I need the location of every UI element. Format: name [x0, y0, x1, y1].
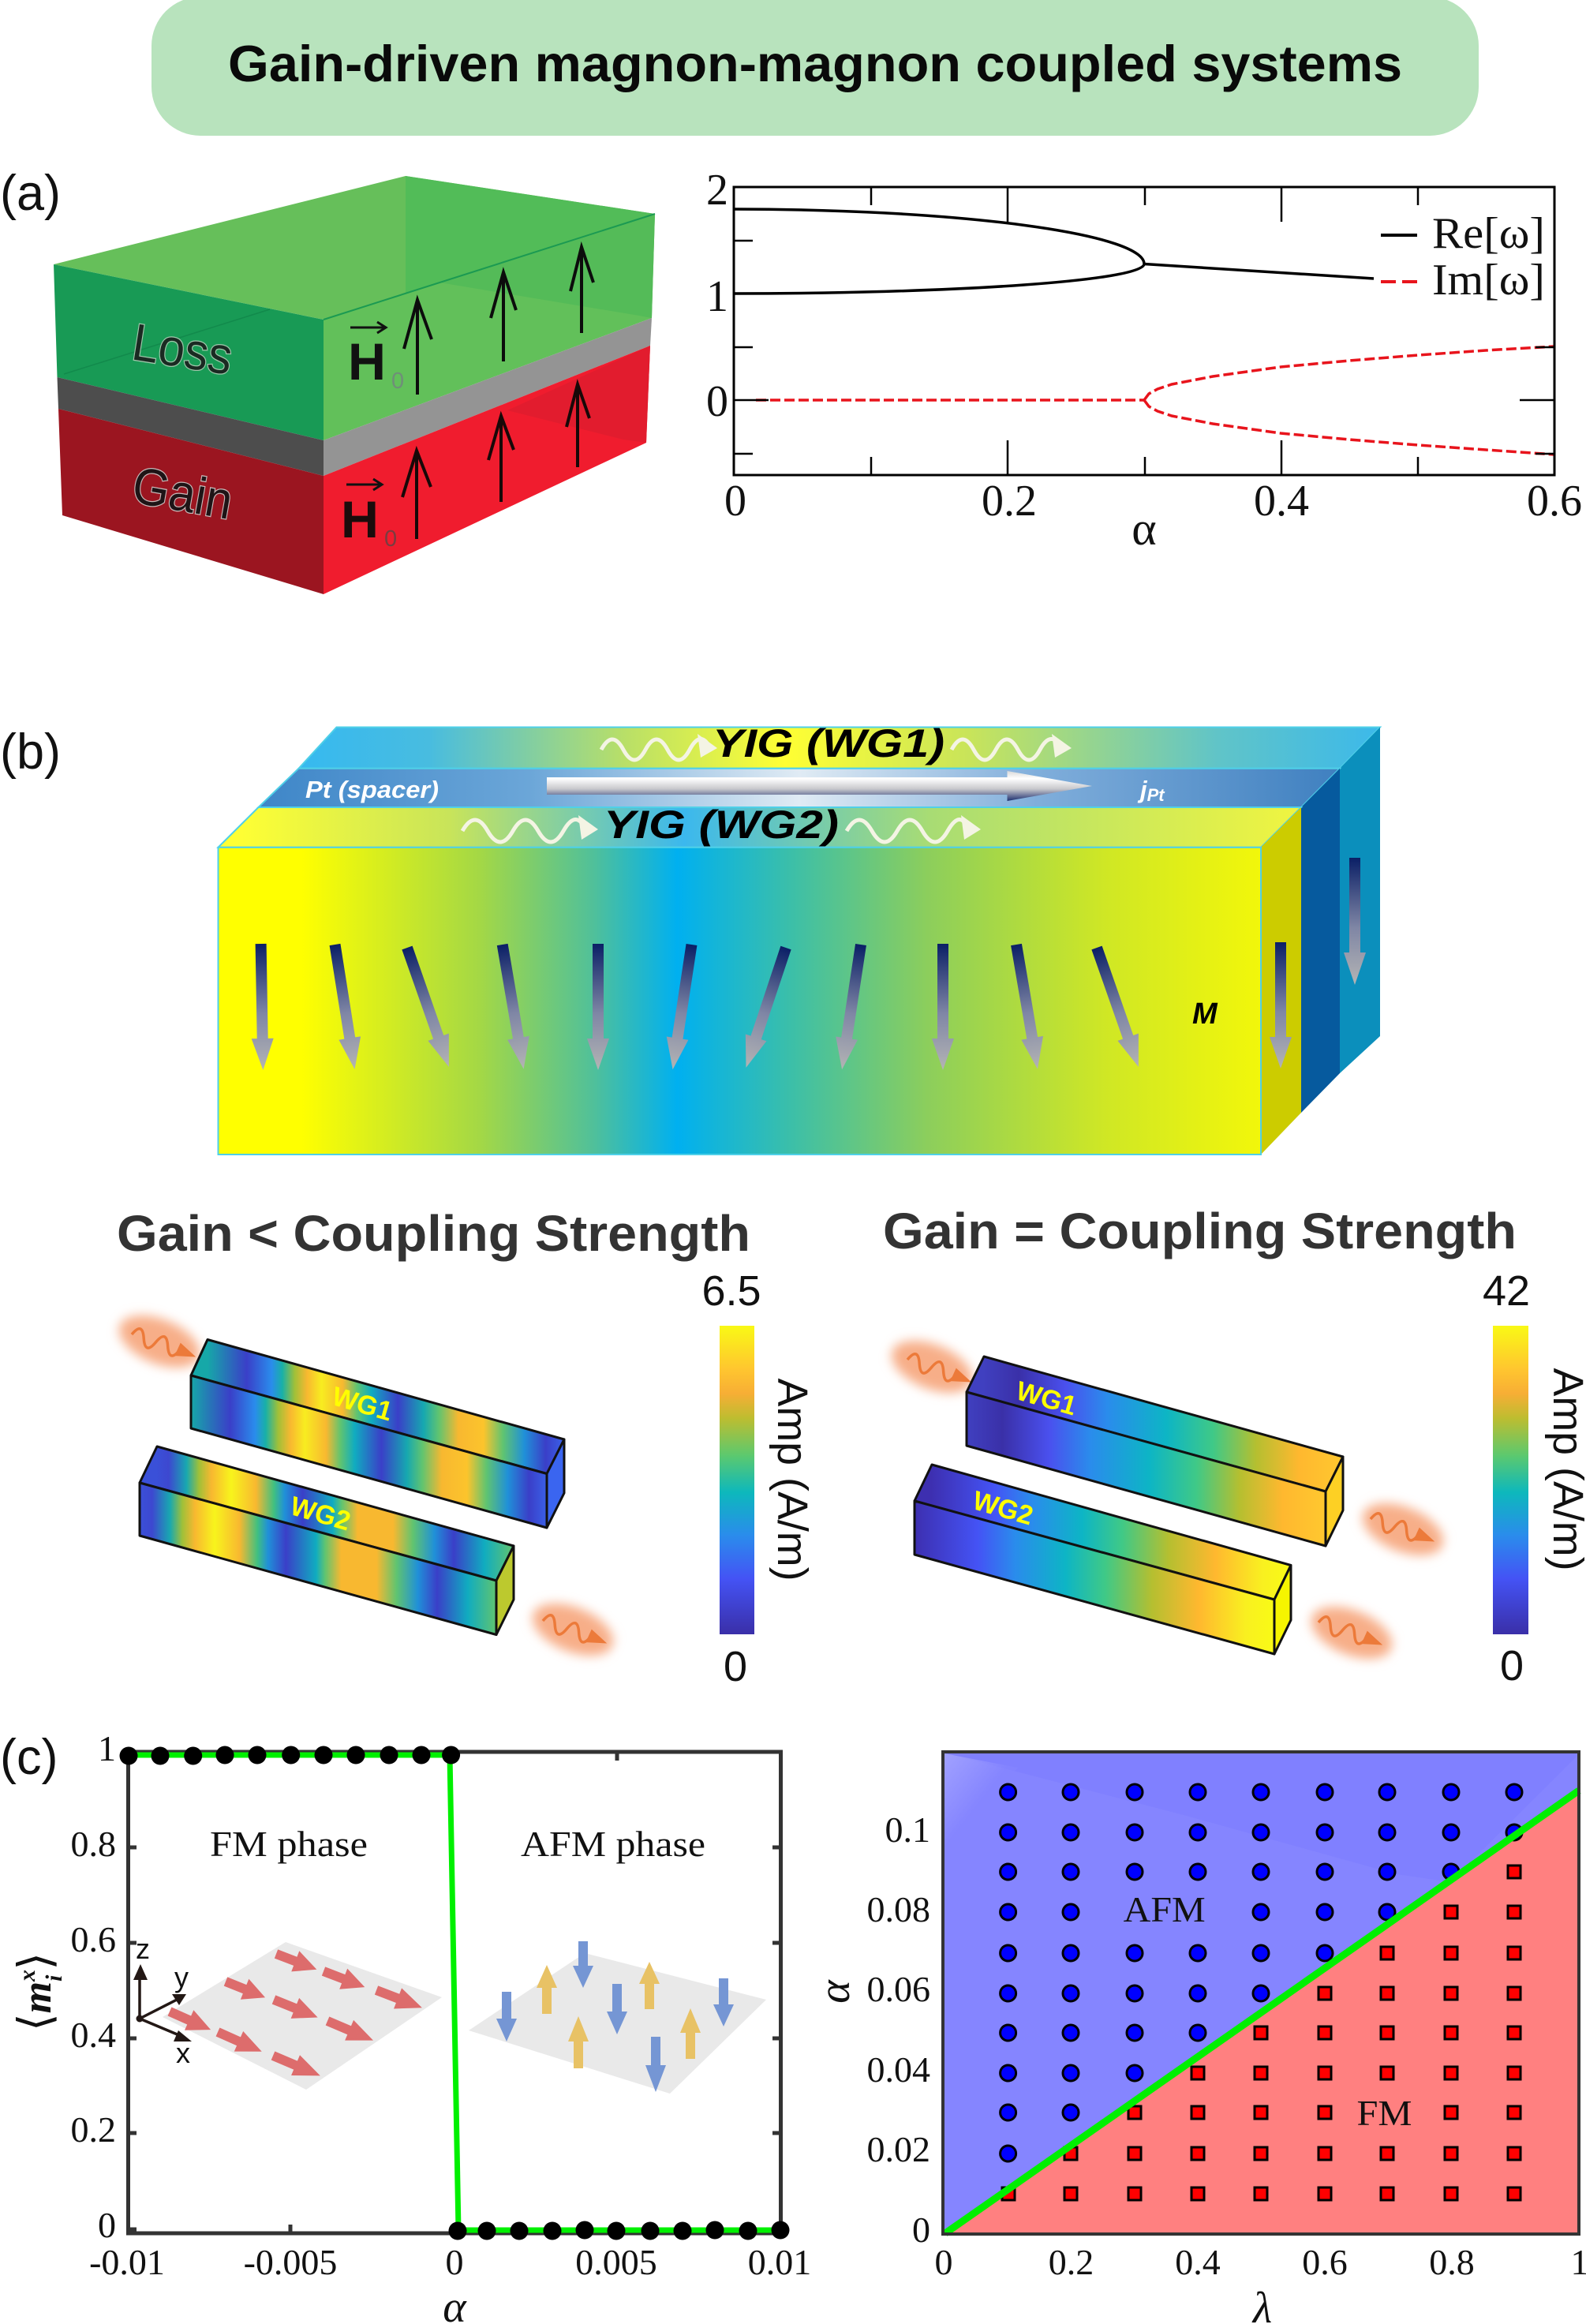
- heading: Gain = Coupling Strength: Gain = Coupling Strength: [883, 1203, 1517, 1259]
- label: H0 lower: H: [341, 490, 379, 548]
- red square markers: [1002, 1866, 1521, 2200]
- label: YIG WG1: YIG (WG1): [713, 721, 944, 765]
- y-axis tick labels: 0: [706, 377, 728, 426]
- y-axis tick labels: [706, 166, 728, 426]
- x tick labels: 0.4: [1175, 2242, 1221, 2282]
- y-axis tick labels: 2: [706, 166, 728, 215]
- y tick labels: 0.04: [866, 2049, 930, 2090]
- panel c: phase diagram: [810, 1752, 1586, 2324]
- y axis title: ⟨m: [8, 1982, 62, 2031]
- label: H0 upper: H: [348, 332, 386, 391]
- waveguide WG2: [915, 1465, 1291, 1654]
- label: YIG WG2: YIG (WG2): [604, 803, 839, 847]
- spin wave arrows: [462, 739, 1062, 842]
- plot frame and ticks: [128, 1752, 781, 2233]
- colorbar: 0 to 6.5: 6.5: [701, 1267, 761, 1315]
- label: WG2: WG2: [970, 1485, 1036, 1531]
- colorbar: 0 to 42: [1483, 1267, 1586, 1690]
- x-axis tick labels: 0.2: [982, 477, 1037, 526]
- current arrow: [547, 771, 1092, 801]
- panel a: loss and gain layered block: [54, 176, 655, 594]
- FM region: [943, 1791, 1579, 2234]
- blue circle markers: [1001, 1784, 1522, 2161]
- y tick labels: 1: [98, 1728, 116, 1768]
- label: jPt: Pt: [1147, 785, 1165, 805]
- data points: [120, 1746, 789, 2240]
- x tick labels: 0.01: [748, 2242, 811, 2282]
- glow input wave: [884, 1330, 980, 1403]
- y tick labels: 0: [912, 2210, 930, 2250]
- upper shading band: [947, 1753, 1577, 1882]
- label: Pt spacer: Pt (spacer): [305, 776, 439, 803]
- x-axis tick labels: [724, 477, 1582, 526]
- x tick labels: 0: [445, 2242, 464, 2282]
- waveguides: gain equals coupling: [884, 1330, 1451, 1669]
- glow input wave: [111, 1305, 208, 1378]
- title banner: [151, 0, 1479, 136]
- x tick labels: -0.01: [89, 2242, 165, 2282]
- heading: Gain < Coupling Strength: Gain < Coupling Strength: [117, 1205, 750, 1262]
- y axis title: ⟩: [8, 1952, 62, 1970]
- label: Loss: Loss: [129, 312, 237, 386]
- curve: Re branches: [734, 209, 1374, 294]
- title banner: Gain-driven magnon-magnon coupled systems: [228, 35, 1402, 92]
- y axis title: α: [810, 1979, 859, 2004]
- waveguide WG2: [140, 1446, 514, 1635]
- y tick labels: [866, 1809, 930, 2250]
- panel c: magnetization vs alpha chart: [8, 1728, 811, 2324]
- waveguides: gain below coupling: [111, 1305, 621, 1666]
- inset: FM spin lattice: [163, 1942, 442, 2090]
- label: WG2: WG2: [287, 1491, 353, 1536]
- label: H0 lower: 0: [384, 526, 397, 552]
- top left highlight: [944, 1753, 1018, 1847]
- x tick labels: [89, 2242, 811, 2282]
- legend: [1381, 209, 1545, 305]
- phase labels: FM phase: [210, 1824, 368, 1864]
- x-axis title: α: [1132, 503, 1157, 555]
- colorbar: 0 to 6.5: [701, 1267, 816, 1690]
- y tick labels: 0.06: [866, 1969, 930, 2009]
- AFM region: [943, 1752, 1579, 2234]
- panel label (c): (c): [0, 1730, 58, 1785]
- magnetization arrows: [250, 858, 1366, 1071]
- x tick labels: 0: [934, 2242, 953, 2282]
- label: H0 lower: [341, 479, 397, 552]
- inset: coordinate axes: y: [174, 1961, 189, 1993]
- curve: Im branches: [756, 346, 1554, 455]
- y tick labels: 0.08: [866, 1889, 930, 1929]
- label: H0 upper: 0: [391, 369, 404, 394]
- x tick labels: 0.005: [575, 2242, 657, 2282]
- axes frame and ticks: [734, 187, 1554, 475]
- inset: coordinate axes: [133, 1933, 192, 2069]
- green curve: [129, 1755, 780, 2230]
- x-axis tick labels: 0: [724, 477, 746, 526]
- x tick labels: 0.2: [1049, 2242, 1094, 2282]
- y-axis tick labels: 1: [706, 272, 728, 321]
- field arrows: red layer: [402, 384, 589, 539]
- panel a: eigenfrequency chart: [706, 166, 1582, 555]
- panel label (a): (a): [0, 166, 61, 221]
- y tick labels: 0.1: [885, 1809, 930, 1850]
- y tick labels: 0: [98, 2205, 116, 2245]
- colorbar: 0 to 6.5: Amp (A/m): [769, 1378, 816, 1581]
- colorbar: 0 to 42: 0: [1500, 1642, 1524, 1690]
- y tick labels: 0.02: [866, 2129, 930, 2169]
- field arrows: green layer: [404, 247, 593, 395]
- glow output wave WG1: [1355, 1493, 1451, 1566]
- glow output wave WG2: [1304, 1596, 1400, 1669]
- y tick labels: 0.4: [71, 2015, 116, 2055]
- x tick labels: 0.8: [1429, 2242, 1475, 2282]
- label: H0 upper: [348, 322, 404, 394]
- legend: Re[ω]: [1432, 209, 1545, 258]
- label: Gain: Gain: [129, 455, 237, 530]
- y tick labels: [71, 1728, 116, 2245]
- x-axis tick labels: 0.6: [1527, 477, 1582, 526]
- x tick labels: -0.005: [244, 2242, 337, 2282]
- x tick labels: [934, 2242, 1586, 2282]
- colorbar: 0 to 42: 42: [1483, 1267, 1530, 1315]
- y axis title: x: [14, 1970, 40, 1982]
- panel b: YIG/Pt/YIG waveguide block: [218, 721, 1380, 1155]
- label: jPt: j: [1140, 776, 1147, 803]
- legend: Im[ω]: [1432, 256, 1545, 305]
- colorbar: 0 to 6.5: 0: [724, 1643, 747, 1690]
- x-axis tick labels: 0.4: [1254, 477, 1309, 526]
- label: M: M: [1192, 997, 1218, 1031]
- y axis title: i: [41, 1974, 67, 1982]
- inset: coordinate axes: z: [136, 1933, 150, 1965]
- plot frame: [943, 1752, 1579, 2234]
- region label: FM: FM: [1357, 2093, 1412, 2133]
- label: WG1: WG1: [1013, 1375, 1079, 1421]
- phase labels: [210, 1824, 705, 1864]
- region label: AFM: AFM: [1124, 1889, 1206, 1929]
- phase boundary line: [945, 1791, 1579, 2233]
- label: WG1: WG1: [329, 1381, 395, 1427]
- inset: coordinate axes: x: [176, 2037, 190, 2069]
- panel label (b): (b): [0, 724, 61, 780]
- y tick labels: 0.6: [71, 1919, 116, 1959]
- x tick labels: 0.6: [1302, 2242, 1348, 2282]
- glow output wave: [525, 1593, 621, 1666]
- y tick labels: 0.8: [71, 1824, 116, 1864]
- inset: AFM spin lattice: [469, 1941, 766, 2094]
- phase labels: AFM phase: [521, 1824, 705, 1864]
- y tick labels: 0.2: [71, 2109, 116, 2150]
- waveguide WG1: [191, 1340, 564, 1528]
- waveguide WG1: [967, 1357, 1343, 1546]
